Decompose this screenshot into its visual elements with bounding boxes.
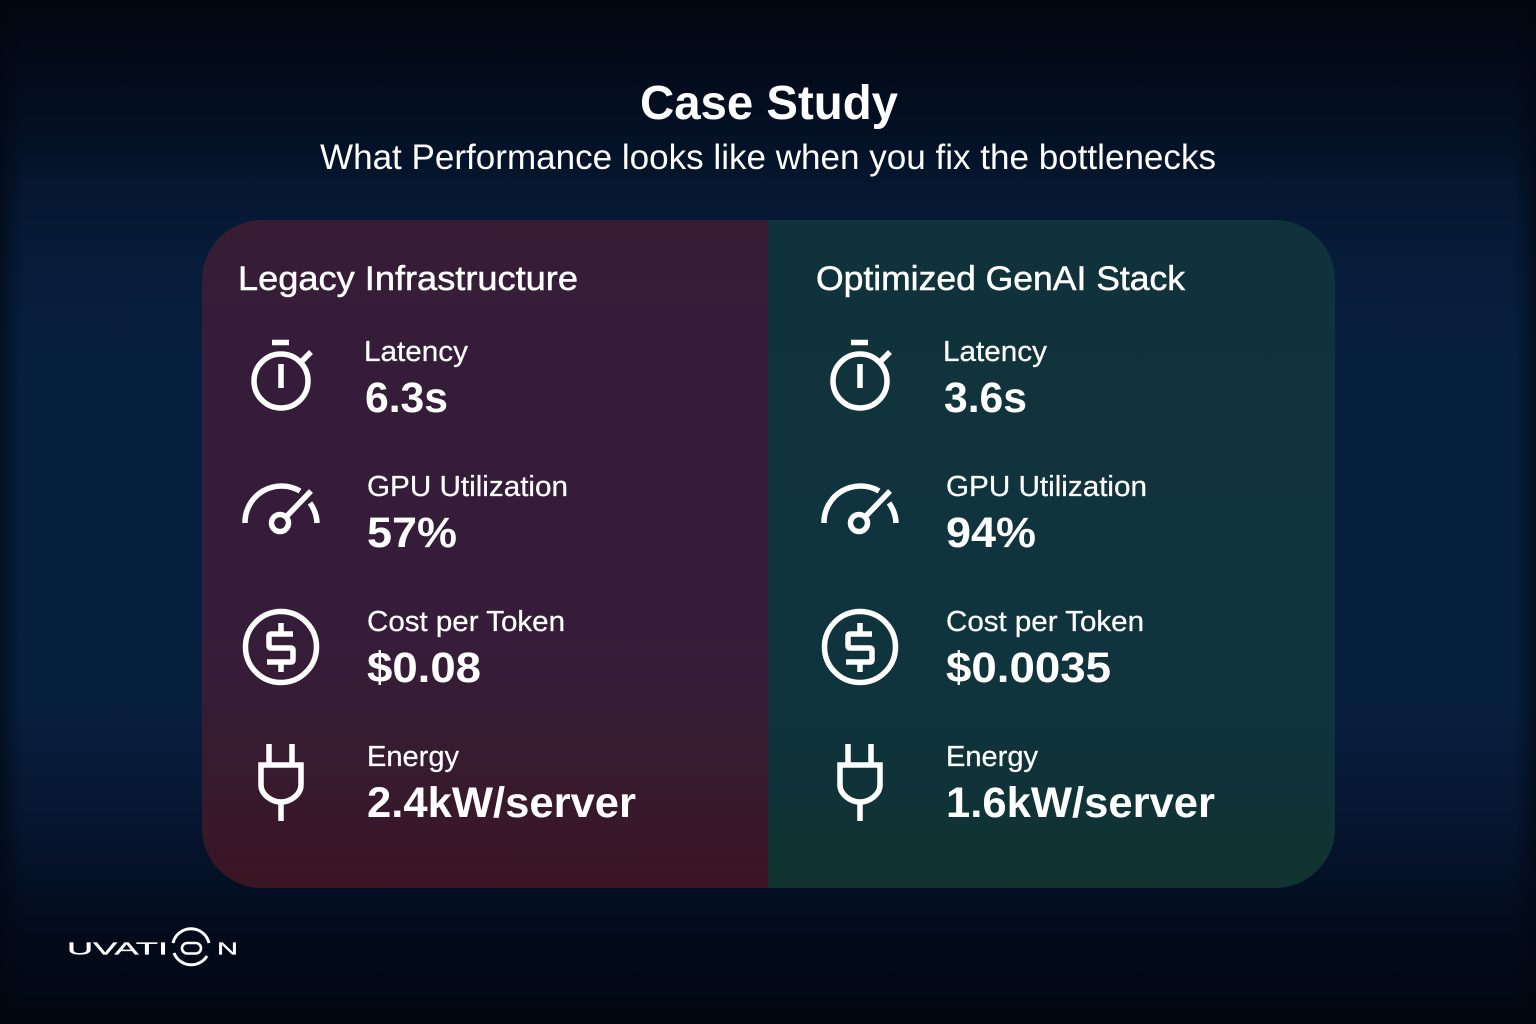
metric: latency <box>364 336 469 422</box>
panel: optimized genai stack <box>768 220 1335 888</box>
metric: gpu utilization: 94% <box>946 509 1036 557</box>
metric: cost per token <box>946 606 1144 692</box>
metric: latency: 3.6s <box>944 374 1027 422</box>
heading: optimized: Optimized GenAI Stack <box>816 260 1186 298</box>
metric: gpu utilization: 57% <box>367 509 457 557</box>
icon: stopwatch <box>254 342 311 408</box>
metric: gpu utilization: GPU Utilization <box>367 471 568 503</box>
panel: legacy infrastructure <box>202 220 768 888</box>
logo: uvation: UVATI <box>67 938 168 958</box>
metric: cost per token: $0.08 <box>367 644 481 692</box>
metric: energy: 2.4kW/server <box>367 779 636 827</box>
metric: energy: 1.6kW/server <box>946 779 1215 827</box>
metric: gpu utilization: GPU Utilization <box>946 471 1147 503</box>
title: Case Study <box>640 77 898 130</box>
icon: stopwatch <box>833 342 890 408</box>
metric: gpu utilization <box>367 471 568 557</box>
icon: gauge <box>824 486 896 532</box>
subtitle: What Performance looks like when you fix the bottlenecks <box>320 138 1216 177</box>
heading: legacy: Legacy Infrastructure <box>238 260 578 298</box>
metric: energy <box>946 741 1215 827</box>
metric: latency <box>943 336 1048 422</box>
metric: cost per token: Cost per Token <box>367 606 565 638</box>
metric: latency: Latency <box>943 336 1048 368</box>
icon: dollar <box>246 612 316 682</box>
icon: plug <box>840 744 880 821</box>
metric: latency: 6.3s <box>365 374 448 422</box>
metric: energy: Energy <box>367 741 459 773</box>
icon: dollar <box>824 612 896 682</box>
logo: uvation: N <box>217 938 238 958</box>
metric: cost per token: Cost per Token <box>946 606 1144 638</box>
metric: energy: Energy <box>946 741 1038 773</box>
metric: cost per token <box>367 606 565 692</box>
logo: uvation <box>67 929 238 965</box>
metric: cost per token: $0.0035 <box>946 644 1111 692</box>
metric: energy <box>367 741 636 827</box>
icon: plug <box>261 744 301 821</box>
metric: latency: Latency <box>364 336 469 368</box>
icon: gauge <box>245 486 317 532</box>
metric: gpu utilization <box>946 471 1147 557</box>
